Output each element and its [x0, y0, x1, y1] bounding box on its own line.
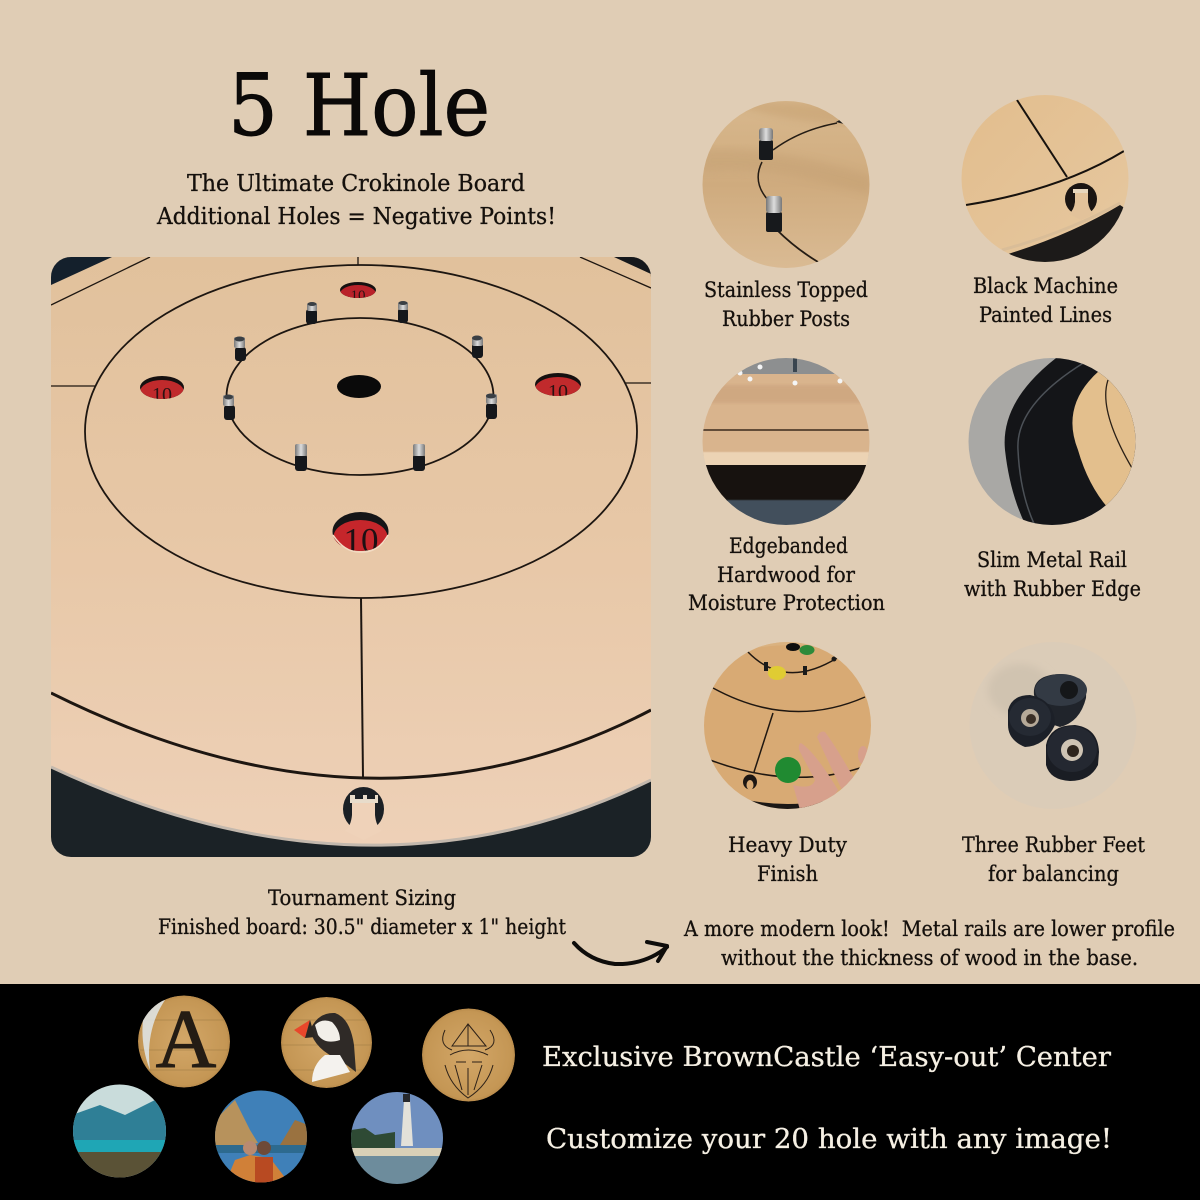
arrow [574, 942, 667, 964]
caption: stainless posts: Rubber Posts [722, 307, 850, 331]
rail note [683, 917, 1175, 970]
subtitle: The Ultimate Crokinole Board [187, 171, 525, 197]
feature photo: painted lines [960, 93, 1135, 270]
scoring holes with red discs [140, 282, 581, 560]
caption: metal rail: with Rubber Edge [964, 577, 1141, 601]
sizing text [158, 886, 566, 939]
caption: edgebanded hardwood: Hardwood for [717, 563, 856, 587]
rail note: without the thickness of wood in the base. [721, 946, 1138, 970]
caption: heavy duty finish: Heavy Duty [728, 833, 847, 857]
feature photo: metal rail [966, 355, 1140, 528]
caption: painted lines: Black Machine [973, 274, 1118, 298]
feature photo: heavy duty finish [702, 640, 874, 812]
caption: rubber feet [962, 833, 1146, 886]
sizing text: Finished board: 30.5" diameter x 1" height [158, 915, 566, 939]
disc: boat photo [214, 1090, 308, 1184]
subtitle [156, 171, 556, 230]
disc: letter A [138, 993, 230, 1088]
caption: stainless posts: Stainless Topped [704, 278, 868, 302]
scoring holes with red discs: 10 [344, 521, 378, 560]
caption: metal rail [964, 548, 1141, 601]
disc: lighthouse photo [350, 1092, 444, 1186]
caption: painted lines: Painted Lines [979, 303, 1112, 327]
disc: letter A: A [156, 993, 217, 1086]
title: 5 Hole [228, 57, 490, 156]
caption: edgebanded hardwood: Moisture Protection [688, 591, 885, 615]
disc: viking [422, 1008, 515, 1102]
caption: heavy duty finish: Finish [757, 862, 818, 886]
caption: edgebanded hardwood [688, 534, 885, 615]
bottom black band [0, 984, 1200, 1200]
scoring holes with red discs: 10 [548, 381, 568, 403]
subtitle: Additional Holes = Negative Points! [156, 204, 556, 230]
sizing text: Tournament Sizing [268, 886, 456, 910]
logo [343, 787, 384, 825]
custom image text: Customize your 20 hole with any image! [546, 1124, 1112, 1155]
feature photo: rubber feet [986, 662, 1099, 781]
caption: painted lines [973, 274, 1118, 327]
foot 2 [1034, 674, 1087, 727]
small logo [1065, 183, 1097, 212]
caption: rubber feet: Three Rubber Feet [962, 833, 1146, 857]
center hole [337, 375, 381, 398]
foot 1 [1008, 695, 1055, 747]
caption: stainless posts [704, 278, 868, 331]
feature photo: stainless posts [702, 100, 870, 270]
caption: heavy duty finish [728, 833, 847, 886]
centre text: Exclusive BrownCastle ‘Easy-out’ Center [542, 1042, 1111, 1073]
posts [223, 301, 497, 471]
caption: edgebanded hardwood: Edgebanded [729, 534, 848, 558]
caption: metal rail: Slim Metal Rail [977, 548, 1127, 572]
disc: lake photo [72, 1084, 168, 1180]
main board photo [51, 257, 651, 857]
disc: puffin [281, 997, 372, 1088]
caption: rubber feet: for balancing [988, 862, 1119, 886]
feature photo: edgebanded hardwood [700, 356, 872, 528]
scoring holes with red discs: 10 [350, 288, 366, 304]
foot 3 [1046, 725, 1099, 781]
scoring holes with red discs: 10 [152, 384, 172, 406]
